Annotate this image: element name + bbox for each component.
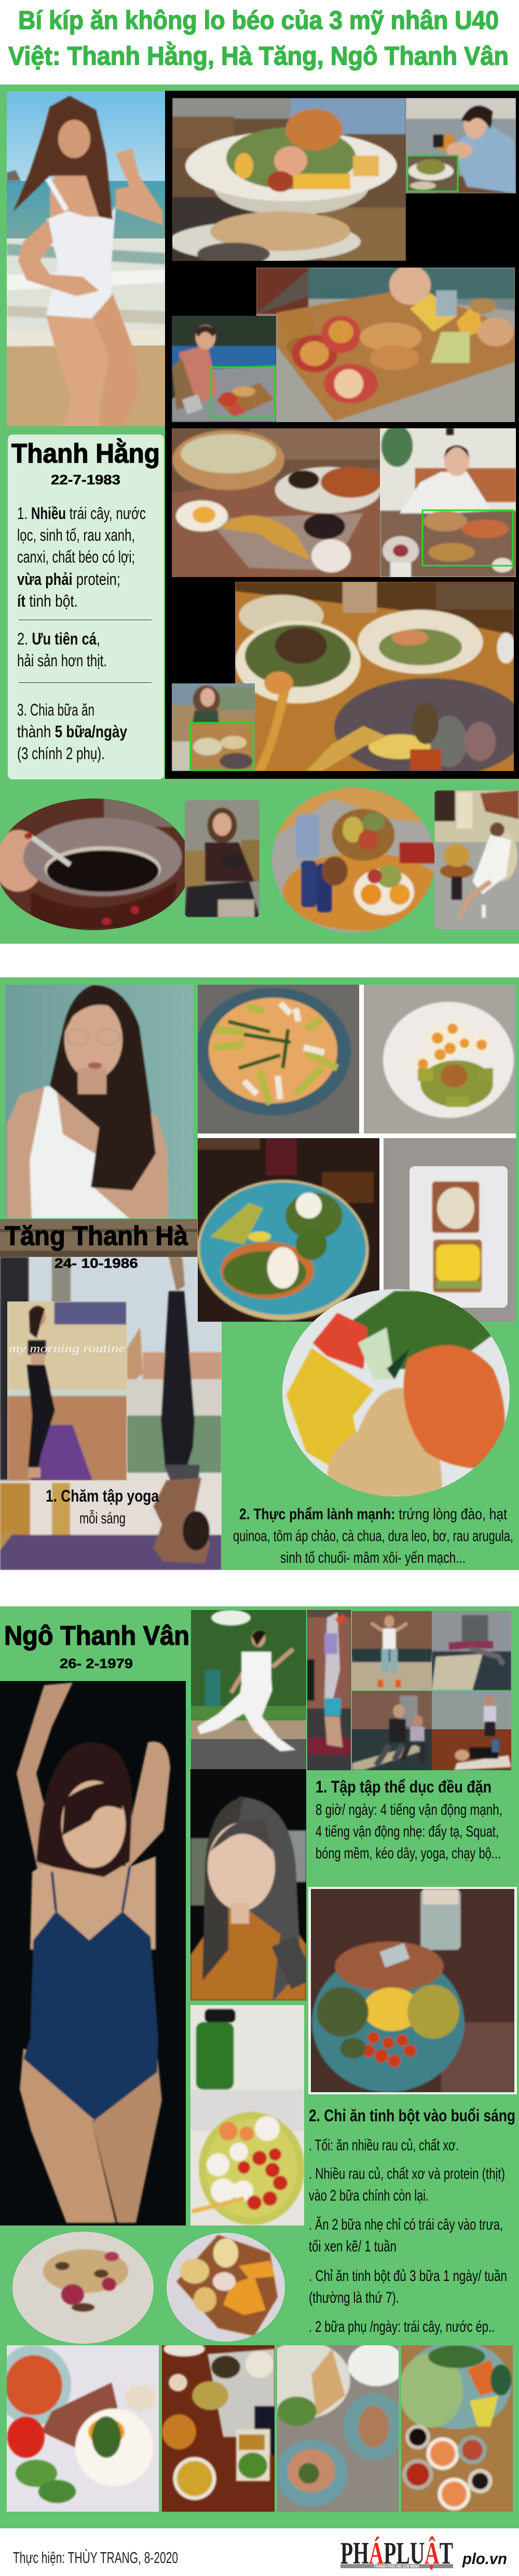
photo: two toasts <box>384 1138 516 1322</box>
text block: exercise tip <box>316 1777 502 1862</box>
photo: salad bowls on wooden table <box>235 582 514 771</box>
text block: starch tip: . Tối: ăn nhiều rau củ, chất xơ. <box>309 2137 459 2154</box>
footer credit: Thực hiện: THÙY TRANG, 8-2020 <box>13 2549 178 2567</box>
date of birth: 24- 10-1986 <box>54 1255 138 1271</box>
text block: exercise tip: 1. Tập tập thể dục đều đặn <box>316 1777 491 1796</box>
photo: juice and fruit plate <box>190 2005 304 2225</box>
logo: plo.vn: plo.vn <box>462 2550 507 2568</box>
icon: green highlight box <box>407 156 458 191</box>
photo: gym trainer top left <box>352 1611 432 1690</box>
icon: green highlight box <box>190 723 253 770</box>
text block: tip 1: canxi, chất béo có lợi; <box>17 548 135 566</box>
text block: tip 2: hải sản hơn thịt. <box>17 651 107 670</box>
logo: Pháp Luật: PHÁPLUẬT <box>340 2536 453 2570</box>
text block: tip 1: vừa phải protein; <box>17 570 120 589</box>
photo: breakfast plate in white frame <box>308 1887 517 2094</box>
text block: starch tip: (thường là thứ 7). <box>309 2289 399 2306</box>
photo: french toast in oval <box>165 2230 287 2344</box>
photo: Thanh Hằng photographing meal <box>406 98 516 193</box>
photo: Thanh Hằng with bowl <box>185 800 260 917</box>
text block: tip 3: thành 5 bữa/ngày <box>17 722 127 741</box>
photo: avocado pizza <box>198 985 359 1133</box>
photo: selfie <box>190 1769 306 2000</box>
photo: gym top right <box>432 1611 511 1690</box>
text block: starch tip: vào 2 bữa chính còn lại. <box>309 2187 429 2204</box>
photo: salad bowl <box>172 98 406 261</box>
photo: coffee bowl in oval <box>0 796 192 933</box>
text block: tip 1: lọc, sinh tố, rau xanh, <box>17 526 135 544</box>
photo: Thanh Hằng on the beach <box>7 91 165 426</box>
date of birth: 22-7-1983 <box>51 472 120 487</box>
title <box>8 6 509 71</box>
info card: Thanh Hằng <box>8 435 164 779</box>
text block: tip 1: 1. Nhiều trái cây, nước <box>17 504 146 523</box>
text block: tip 3 <box>17 701 127 763</box>
photo: oatmeal in oval <box>10 2230 156 2346</box>
text block: yoga tip <box>46 1487 159 1527</box>
photo: gym headstand <box>307 1610 351 1770</box>
icon: green highlight box <box>211 367 275 417</box>
photo: yoga headstand <box>0 1255 222 1570</box>
photo: Thanh Hằng at the pool <box>172 316 276 422</box>
photo: Ngô Thanh Vân portrait <box>0 1681 186 2225</box>
text block: starch tip: tối xen kẽ/ 1 tuần <box>309 2238 397 2255</box>
text block: tip 2 <box>17 629 107 670</box>
photo: running <box>191 1610 306 1769</box>
text block: healthy foods: sinh tố chuối- mâm xôi- yến mạch... <box>280 1549 466 1566</box>
photo: chicken tray <box>172 428 380 577</box>
text block: tip 3: (3 chính 2 phụ). <box>17 744 105 763</box>
text block: tip 3: 3. Chia bữa ăn <box>17 701 94 719</box>
photo: blue plate with poached egg <box>198 1138 379 1322</box>
text block: yoga tip: 1. Chăm tập yoga <box>46 1487 159 1505</box>
logo: Pháp Luật: THÀNH PHỐ HỒ CHÍ MINH <box>374 2564 419 2569</box>
photo: meat and fried egg <box>7 2345 159 2512</box>
photo: Thanh Hằng city view <box>172 683 255 771</box>
text block: healthy foods <box>233 1506 513 1566</box>
photo: gym bottom left <box>352 1691 432 1770</box>
text block: tip 1: ít tinh bột. <box>17 592 78 610</box>
date of birth: 26- 2-1979 <box>60 1656 133 1671</box>
heading: name: Ngô Thanh Vân <box>4 1621 189 1651</box>
photo: charcuterie board <box>256 268 515 422</box>
heading: name: Tăng Thanh Hà <box>5 1221 188 1251</box>
caption on inset: my morning routine <box>9 1342 125 1355</box>
panel: Ngô Thanh Vân <box>0 1606 519 2528</box>
heading: name: Thanh Hằng <box>11 438 160 469</box>
photo: morning routine inset <box>7 1301 127 1480</box>
photo: fresh vegetables and sauces <box>401 2345 513 2512</box>
panel: Tăng Thanh Hà <box>0 977 519 1571</box>
photo: Tăng Thanh Hà portrait <box>5 985 193 1219</box>
photo: eggs and avocado <box>364 985 516 1133</box>
icon: green highlight box <box>422 510 513 566</box>
photo: table of Vietnamese dishes <box>162 2345 275 2512</box>
text block: yoga tip: mỗi sáng <box>79 1510 126 1527</box>
photo: fruit tray in oval <box>270 786 444 936</box>
photo: Thanh Hằng in hotel room <box>434 790 519 930</box>
photo: spring roll dishes <box>277 2345 399 2512</box>
photo: quinoa bowl in circle <box>280 1289 511 1499</box>
text block: tip 2: 2. Ưu tiên cá, <box>17 629 100 648</box>
photo: gym bottom right <box>432 1691 511 1770</box>
name band <box>0 1219 197 1257</box>
photo: Thanh Hằng at table <box>380 428 516 577</box>
panel: Thanh Hằng <box>0 85 519 944</box>
text block: starch tip <box>309 2106 515 2335</box>
text block: tip 1 <box>17 504 146 610</box>
